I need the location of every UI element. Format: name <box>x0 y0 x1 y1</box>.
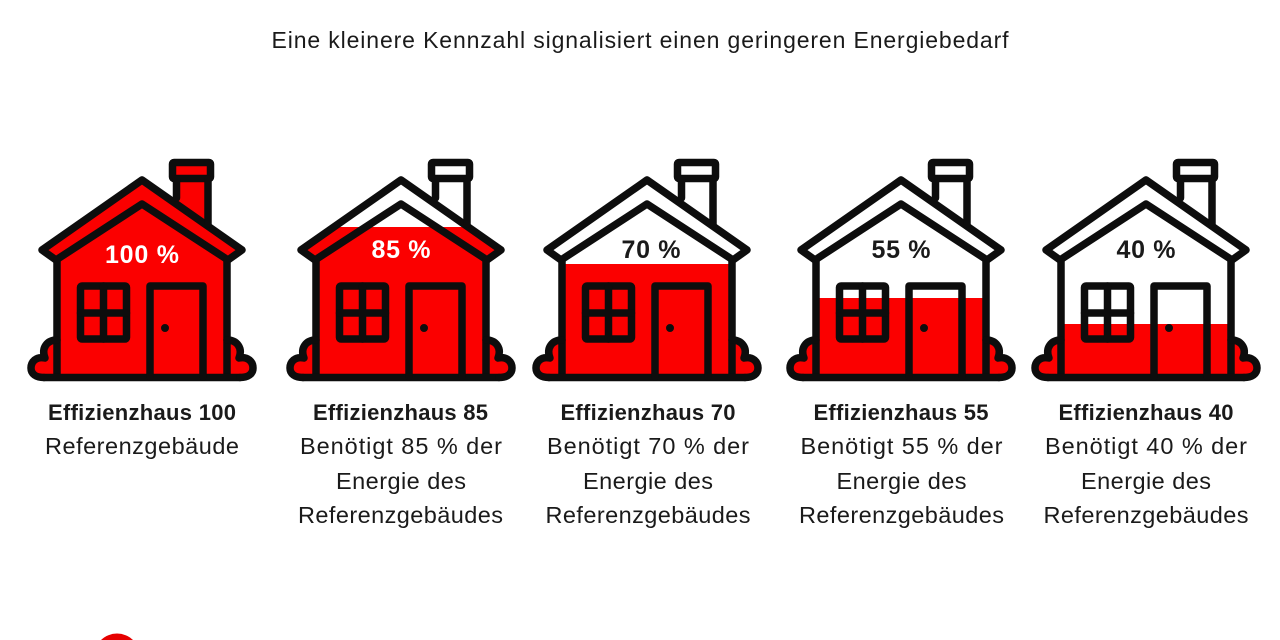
label: Effizienzhaus 55: Effizienzhaus 55 <box>814 400 988 425</box>
label: Effizienzhaus 100: Referenzgebäude <box>45 433 239 459</box>
icon: red logo circle cut off at bottom edge <box>101 634 133 640</box>
icon: house 70 %: 70 % <box>622 236 680 264</box>
icon: house 55 % <box>790 162 1012 378</box>
label: Effizienzhaus 100: Effizienzhaus 100 <box>48 400 236 425</box>
icon: house 40 % <box>1035 162 1257 378</box>
label: Effizienzhaus 85: Energie des <box>336 468 466 494</box>
label: Effizienzhaus 55: Energie des <box>836 468 966 494</box>
icon: house 100 % <box>31 162 253 378</box>
label: Effizienzhaus 70: Energie des <box>583 468 713 494</box>
label: Effizienzhaus 40: Referenzgebäudes <box>1044 502 1248 528</box>
label: Effizienzhaus 85: Benötigt 85 % der <box>300 433 502 459</box>
label: Effizienzhaus 70 <box>546 400 750 528</box>
panel: Effizienzhaus 40 <box>1035 162 1257 528</box>
label: Effizienzhaus 55 <box>799 400 1004 528</box>
label: Effizienzhaus 70: Effizienzhaus 70 <box>560 400 736 425</box>
label: Effizienzhaus 40 <box>1044 400 1248 528</box>
icon: house 55 %: 55 % <box>872 236 930 264</box>
label: Effizienzhaus 85: Effizienzhaus 85 <box>313 400 488 425</box>
title: Eine kleinere Kennzahl signalisiert einen geringeren Energiebedarf <box>272 27 1009 53</box>
panel: Effizienzhaus 70 <box>536 162 758 528</box>
icon: house 85 %: 85 % <box>372 236 430 264</box>
panel: Effizienzhaus 55 <box>790 162 1012 528</box>
icon: house 85 % <box>290 162 512 378</box>
label: Effizienzhaus 70: Benötigt 70 % der <box>547 433 749 459</box>
label: Effizienzhaus 70: Referenzgebäudes <box>546 502 750 528</box>
label: Effizienzhaus 55: Referenzgebäudes <box>799 502 1004 528</box>
panel: Effizienzhaus 85 <box>290 162 512 528</box>
icon: house 100 %: 100 % <box>105 241 179 269</box>
label: Effizienzhaus 85: Referenzgebäudes <box>298 502 503 528</box>
label: Effizienzhaus 40: Energie des <box>1081 468 1211 494</box>
label: Effizienzhaus 55: Benötigt 55 % der <box>800 433 1003 459</box>
label: Effizienzhaus 40: Effizienzhaus 40 <box>1058 400 1234 425</box>
label: Effizienzhaus 40: Benötigt 40 % der <box>1045 433 1247 459</box>
icon: house 40 %: 40 % <box>1116 236 1176 264</box>
label: Effizienzhaus 85 <box>298 400 503 528</box>
label: Effizienzhaus 100 <box>45 400 239 459</box>
icon: house 70 % <box>536 162 758 378</box>
panel: Effizienzhaus 100 <box>31 162 253 459</box>
